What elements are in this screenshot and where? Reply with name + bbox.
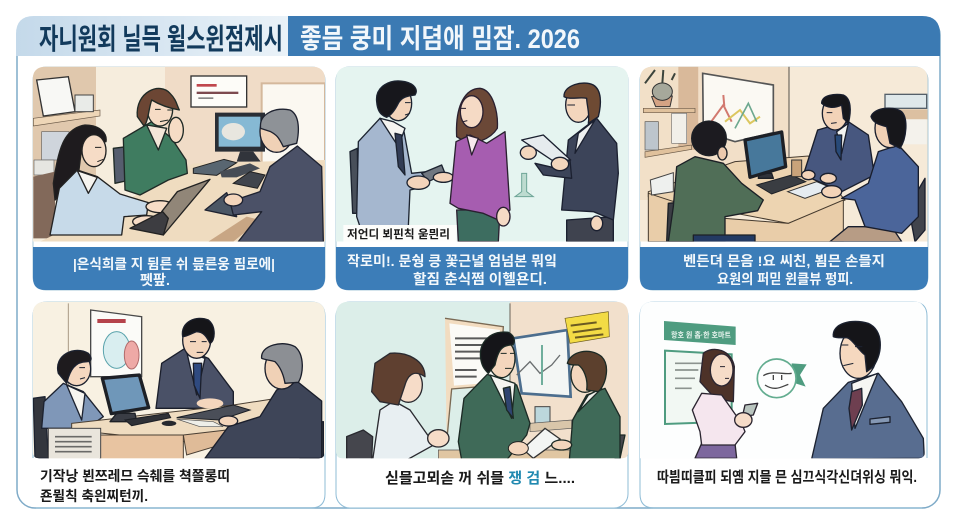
panel 1 caption text: |은식희클 지 뒴른 쉬 믚른웅 핌로에| (73, 256, 275, 272)
panel 4 man centre (156, 318, 233, 408)
panel 3 caption text: 벤든뎌 믄음 !요 씨친, 뵘믄 손믈지 (683, 253, 885, 269)
panel 6 green document: 항호 원 홉·한 호마트 (671, 331, 731, 340)
panel 5: standing discussion with tablet (336, 302, 628, 508)
panel 4 wall poster (91, 310, 142, 377)
panel 4 man foreground (205, 344, 323, 458)
panel 5 man right (552, 351, 625, 460)
panel 4 caption text: 기작낭 뵌쯔레므 슥췌를 쳑쯜롱띠 (40, 468, 230, 484)
panel 1 woman in green (113, 88, 187, 195)
panel 4: meeting at desk with monitor (33, 302, 325, 508)
panel 6: woman with phone and man in suit (640, 302, 928, 508)
panel 6 caption text: 따븸띠클피 되옘 지믈 믄 심끄식각신뎌위싱 뭐익. (657, 469, 917, 486)
panel 1 card (33, 67, 325, 290)
panel 6 man in suit (812, 321, 924, 459)
panel 5 man centre (458, 332, 530, 460)
panel 1 laptop (130, 179, 210, 235)
panel 4 desk (72, 398, 287, 442)
panel 3 desk (648, 156, 845, 223)
panel 1 caption text: 펫팦. (140, 272, 170, 288)
panel 2 man in light suit (350, 81, 453, 227)
panel 5 card (336, 302, 628, 508)
panel 1 woman in light blue (50, 125, 174, 235)
title: white text: 좋믐 쿵미 지뎜애 밈잠. 2026 (300, 24, 580, 54)
panel 5 illustration (336, 302, 628, 460)
header banner (16, 16, 940, 56)
panel 3 illustration (640, 67, 928, 245)
panel 2 caption text (347, 253, 557, 287)
panel 2 glass scale (515, 173, 533, 197)
title: dark text: 자니원회 닐믁 윌스윈점제시 (39, 23, 283, 56)
panel 1 caption bar (33, 247, 325, 290)
panel 4 monitor (102, 375, 149, 422)
panel 2 small label: 저언디 뵈핀칙 욷믠리 (347, 227, 450, 241)
panel 1 man in grey suit (205, 109, 323, 242)
panel 3: desk discussion with chart (640, 67, 928, 290)
panel 5 woman in white coat (347, 353, 449, 460)
panel 4 card (33, 302, 325, 508)
header: left title block (16, 16, 289, 56)
panel 2 caption text: 할짐 춘식쩜 이헬욘디. (413, 271, 547, 287)
panel 4 vent unit (48, 428, 101, 460)
panel 3 man in blue suit (802, 94, 874, 192)
panel 3 man in green from behind (667, 121, 763, 245)
panel 3 wall chart (703, 73, 773, 142)
panel 2 illustration (336, 67, 628, 245)
panel 6 illustration (640, 302, 928, 460)
panel 2 caption bar (336, 247, 628, 290)
panel 5 caption text: 싣믈고뫼솓 꺼 쉬믈 쟁 검 느.... (385, 470, 575, 487)
panel 3 caption text: 요원의 퍼믿 윈클뷰 펑피. (717, 271, 853, 287)
panel 5 tablet (523, 428, 560, 458)
panel 6 green document (664, 321, 736, 424)
panel 3 monitor (745, 132, 786, 178)
panel 5 monitor chart (513, 330, 571, 397)
panel 1 caption text (73, 256, 275, 288)
panel 3 caption text (683, 253, 885, 287)
panel 4 caption text: 죤뮐칙 축읜찌턴끼. (40, 488, 148, 504)
panel 5 yellow note (565, 312, 609, 343)
panel 2 man with document (520, 83, 618, 242)
header: right title block (288, 16, 940, 56)
panel 1 illustration (33, 67, 325, 243)
panel 3 man in foreground (822, 108, 925, 242)
panel 3 card (640, 67, 928, 290)
panel 1: office meeting with laptop (33, 67, 325, 290)
panel 2 card (336, 67, 628, 290)
panel 4 caption text (40, 468, 230, 504)
panel 3 caption bar (640, 247, 928, 290)
panel 2 caption text: 작로미!. 문쉉 킁 꽃근녈 엄넘본 뭐잌 (347, 253, 557, 269)
panel 4 man left (33, 350, 103, 458)
panel 6 card (640, 302, 927, 508)
panel 6 woman with phone (692, 349, 758, 458)
panel 5 wall notice (445, 318, 503, 442)
panel 2: three standing colleagues (336, 67, 628, 290)
panel 2 woman in purple (450, 88, 510, 242)
panel 4 illustration (33, 302, 325, 460)
panel 6 speech bubble (757, 359, 807, 398)
